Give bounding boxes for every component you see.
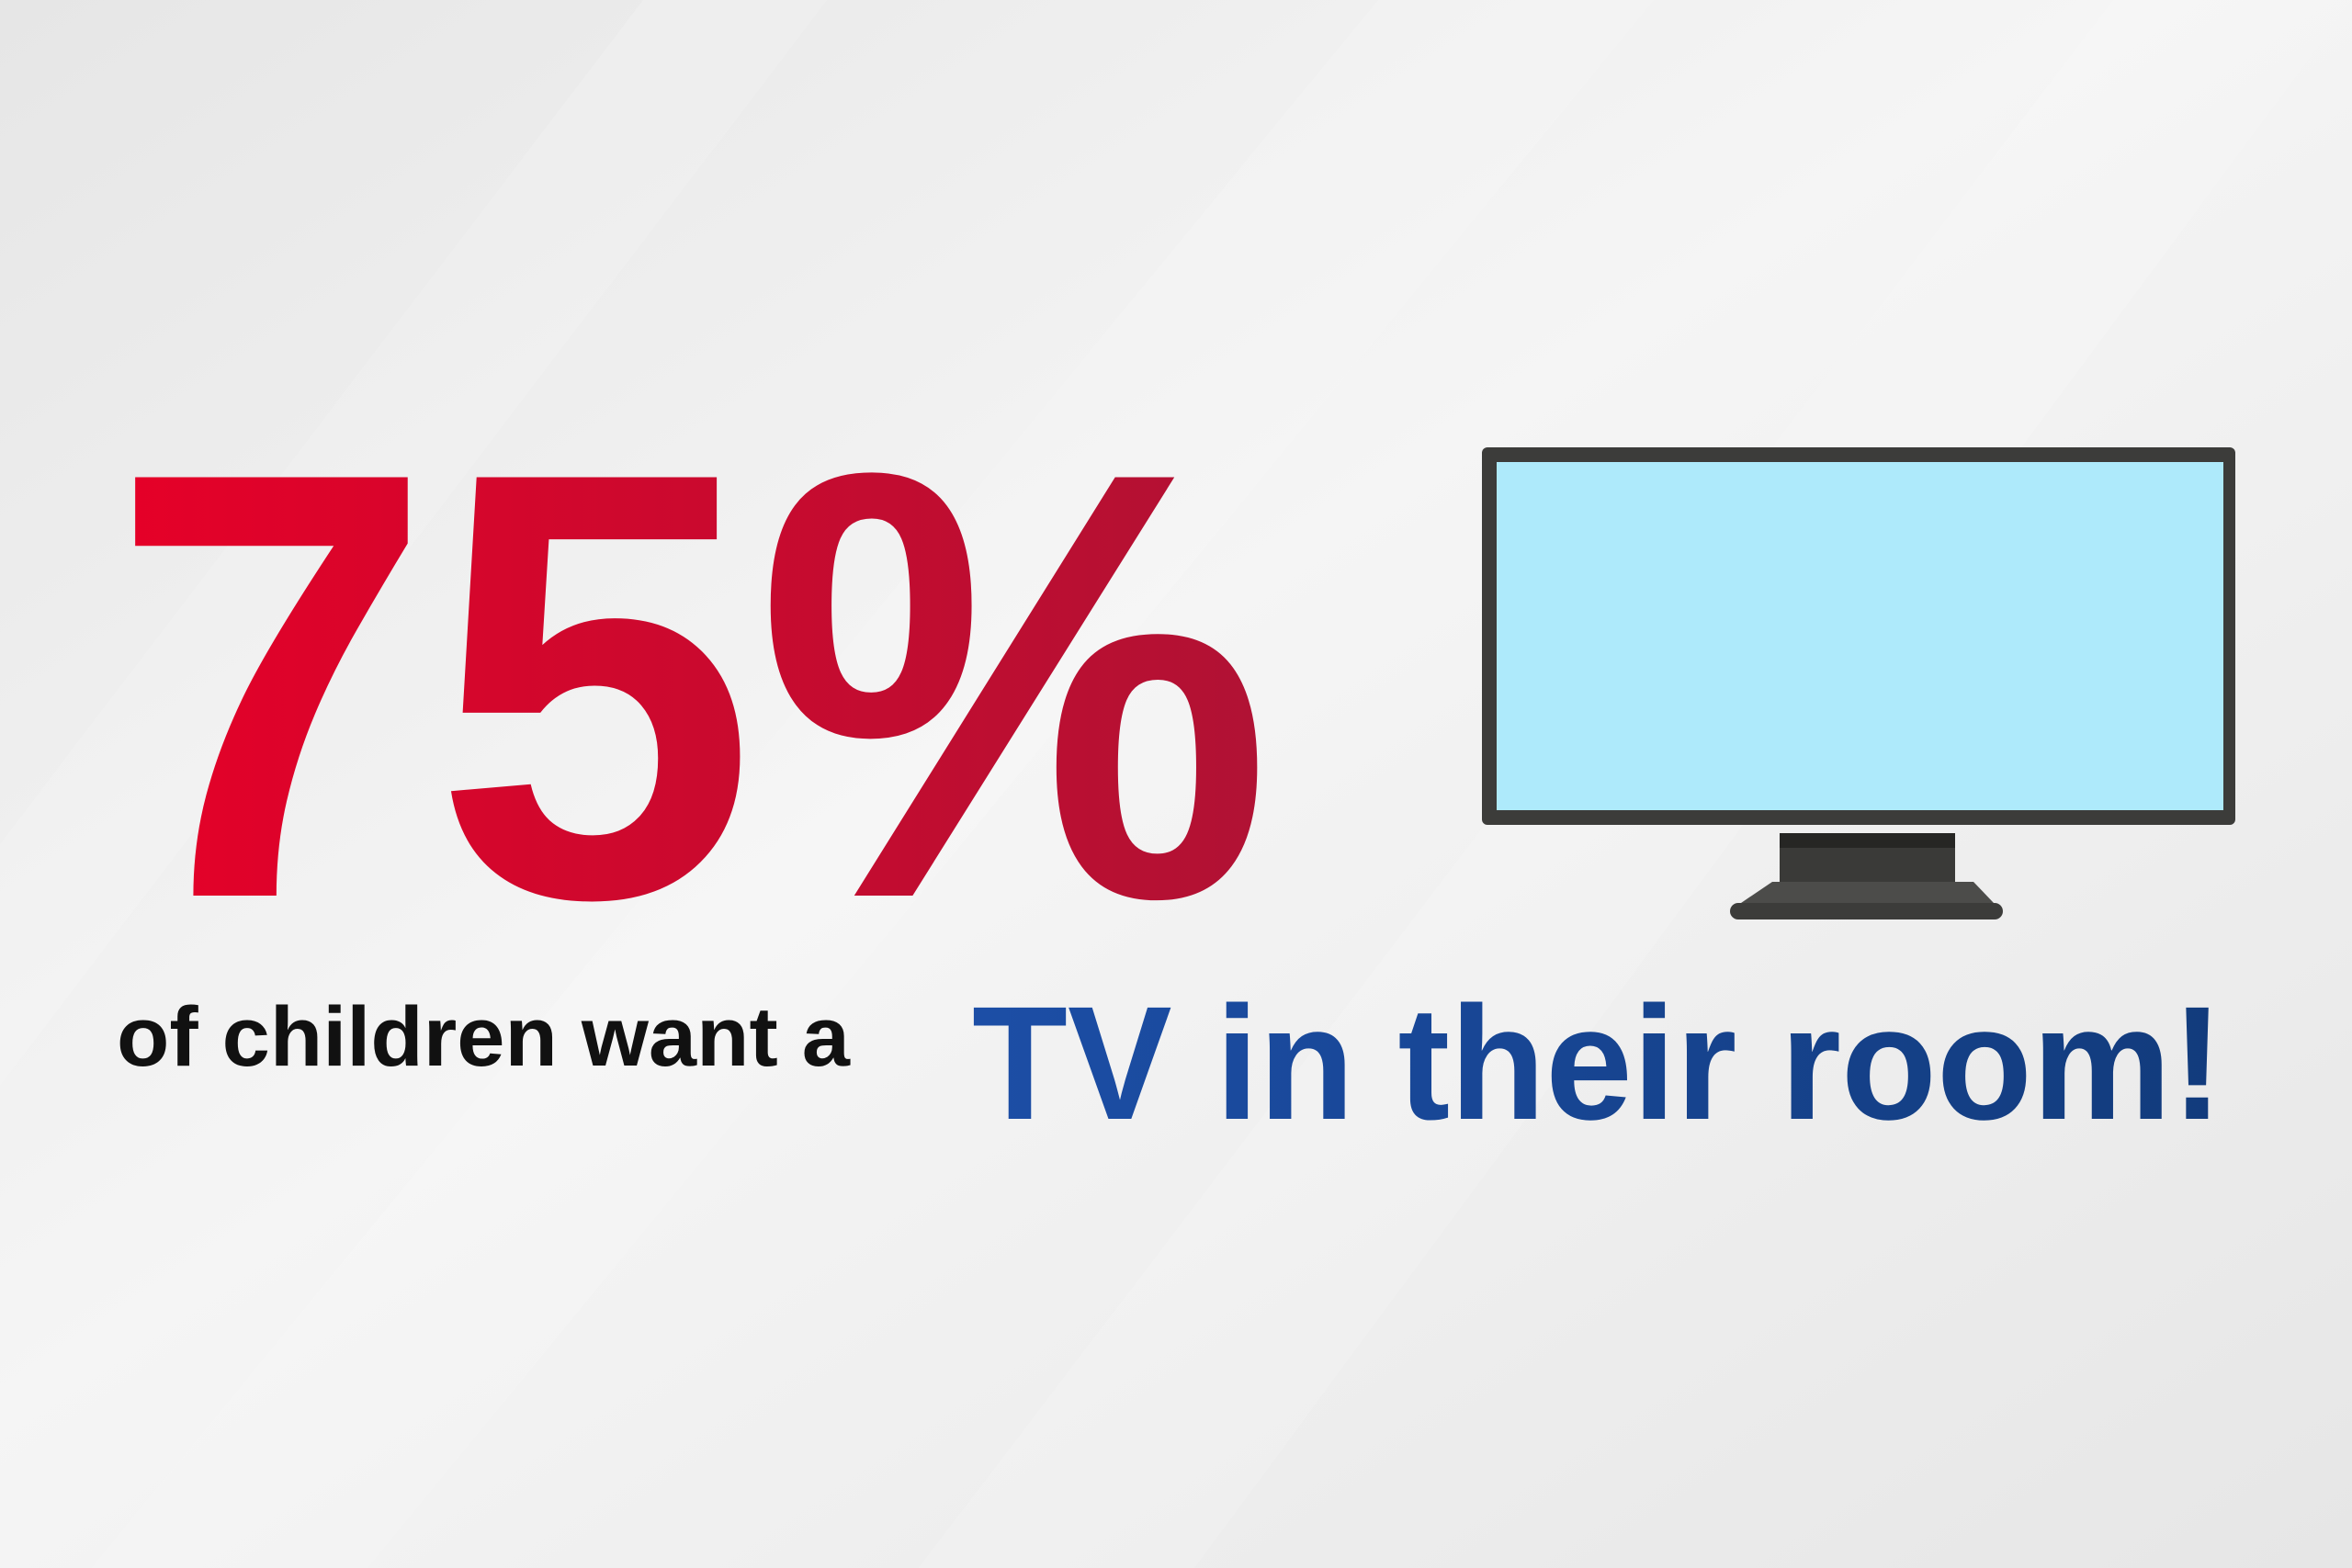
highlight: TV in their room!: TV in their room! [972, 974, 2223, 1154]
headline number: 75%: 75% [110, 346, 1272, 1025]
caption: of children want a: of children want a [117, 990, 851, 1084]
icon: television [1482, 447, 2235, 919]
